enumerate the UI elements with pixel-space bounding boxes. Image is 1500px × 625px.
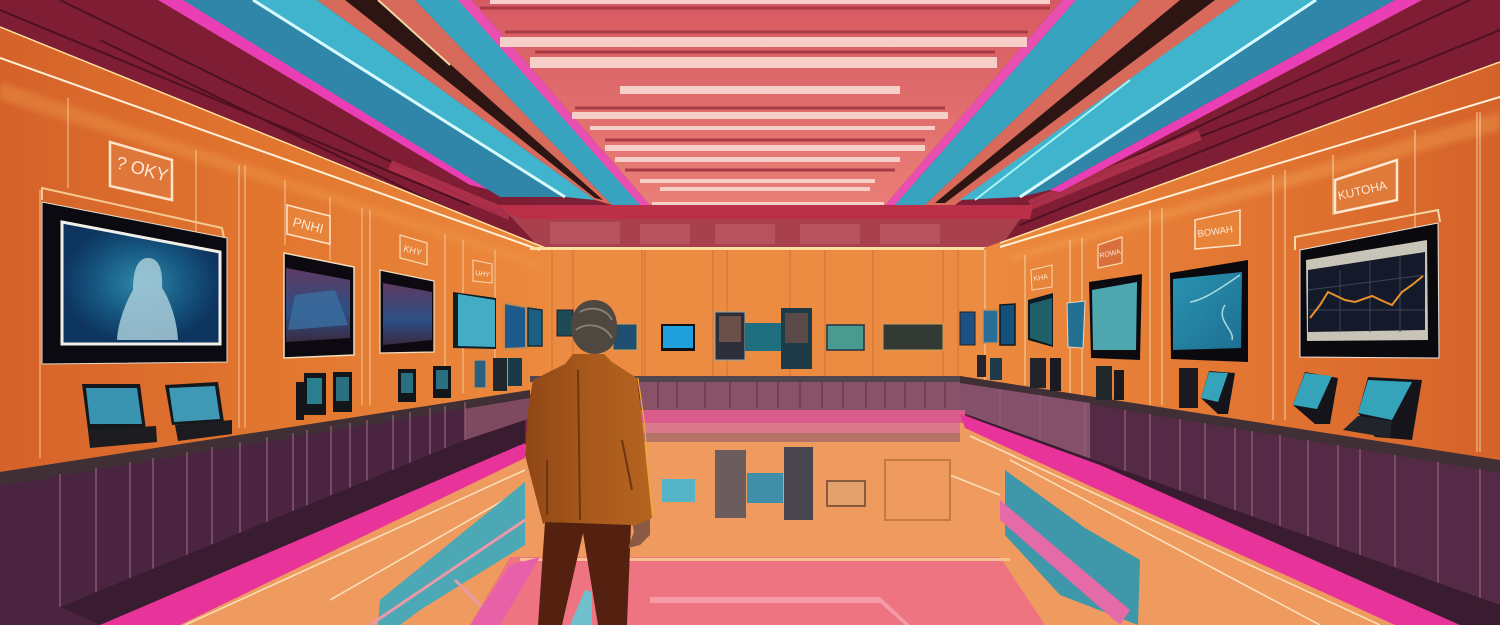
tablet small — [1201, 371, 1235, 414]
screen: left 5 — [504, 303, 526, 349]
ceiling: left blue strip — [183, 0, 565, 197]
floor: right teal reflections — [1005, 470, 1140, 625]
reflective floor — [60, 410, 1500, 625]
screen: left 3 — [380, 270, 434, 353]
sign: left wall 2: PNHI — [291, 214, 325, 236]
screen: right 5 — [1067, 301, 1085, 348]
icon: ghostly figure — [117, 258, 178, 340]
ceiling: left cyan strip — [255, 0, 595, 200]
person: trousers — [538, 522, 631, 625]
ceiling: left salmon strip with dark channel — [317, 0, 612, 205]
ceiling: right blue and cyan strips — [960, 0, 1318, 200]
back wall screens — [557, 308, 998, 369]
ceiling: rear burgundy bulkhead — [500, 205, 1030, 248]
floor: right magenta band — [960, 414, 1460, 625]
screen: left 2 — [284, 253, 354, 358]
sign: right wall 4 — [1031, 265, 1052, 290]
sign: left wall 4 — [473, 260, 492, 283]
floor: left teal reflections — [378, 482, 525, 625]
sign: right wall 3 — [1098, 237, 1122, 268]
ceiling — [0, 0, 1500, 250]
ceiling: right magenta edge and cyan — [885, 0, 1076, 205]
ceiling: right salmon strip with dark channel — [925, 0, 1240, 205]
ceiling: left inner cyan and magenta edge — [415, 0, 645, 205]
person seen from behind — [525, 300, 653, 625]
tablet 2 — [165, 382, 232, 441]
tablet 1 — [82, 384, 157, 448]
screen: left 4 — [453, 292, 496, 349]
sign: right wall 2: BOWAH — [1197, 224, 1234, 240]
left counter with panels — [0, 390, 530, 625]
sign: right wall 1 — [1335, 160, 1397, 213]
tablets far — [977, 355, 1198, 408]
back counter with panels — [530, 376, 962, 410]
sign: left wall 3 — [400, 235, 427, 265]
tablets: left counter — [82, 358, 522, 448]
right counter with panels — [960, 376, 1500, 605]
person: hair — [571, 300, 617, 354]
ceiling: right dark red wedge — [1000, 0, 1500, 244]
sign: left wall 4: UHY — [475, 270, 491, 279]
ceiling: right magenta strip — [1050, 0, 1422, 192]
ceiling: left dark red wedge — [0, 0, 540, 250]
sign: left wall 2 — [287, 205, 330, 244]
floor: rear pink strip — [640, 410, 965, 423]
screen: left 6 — [528, 308, 542, 346]
ceiling: left magenta strip — [158, 0, 512, 195]
person: jacket — [525, 354, 652, 526]
ceiling: light strips — [490, 0, 1050, 205]
floor: pink foreground — [470, 557, 1045, 625]
screen: right 3 — [1089, 274, 1142, 360]
floor: left magenta band — [100, 443, 525, 625]
left wall — [0, 27, 548, 472]
sign: left wall 1 — [110, 142, 172, 200]
back wall — [530, 247, 1000, 380]
right wall — [984, 62, 1500, 472]
sign: right wall 1: KUTOHA — [1337, 178, 1388, 203]
person: hand — [628, 516, 650, 548]
screen: right 6 — [1000, 304, 1015, 345]
tablet large — [1343, 377, 1422, 440]
tablets: right counter — [977, 355, 1422, 440]
tablets 3 to 9 — [296, 358, 522, 420]
floor: dark wedges under counters — [60, 420, 525, 625]
tablet mid — [1293, 372, 1338, 424]
screen: right 4 — [1028, 293, 1053, 347]
floor: reflected panels — [640, 423, 960, 433]
sign: right wall 4: KHA — [1033, 274, 1049, 283]
sign: right wall 3: ROWA — [1099, 249, 1122, 260]
sign: right wall 2 — [1195, 210, 1240, 249]
floor: orange reflection base — [100, 415, 1460, 625]
sign: left wall 3: KHY — [402, 243, 423, 258]
screen: right 2 — [1170, 260, 1248, 362]
line chart — [1308, 252, 1425, 332]
floor: reflected screens — [662, 447, 950, 520]
sign: left wall 1: ? OKY — [114, 153, 170, 186]
ceiling: centre panel — [472, 0, 1062, 205]
screen: left large portrait display — [42, 188, 227, 364]
screen: right large chart display — [1295, 210, 1440, 358]
